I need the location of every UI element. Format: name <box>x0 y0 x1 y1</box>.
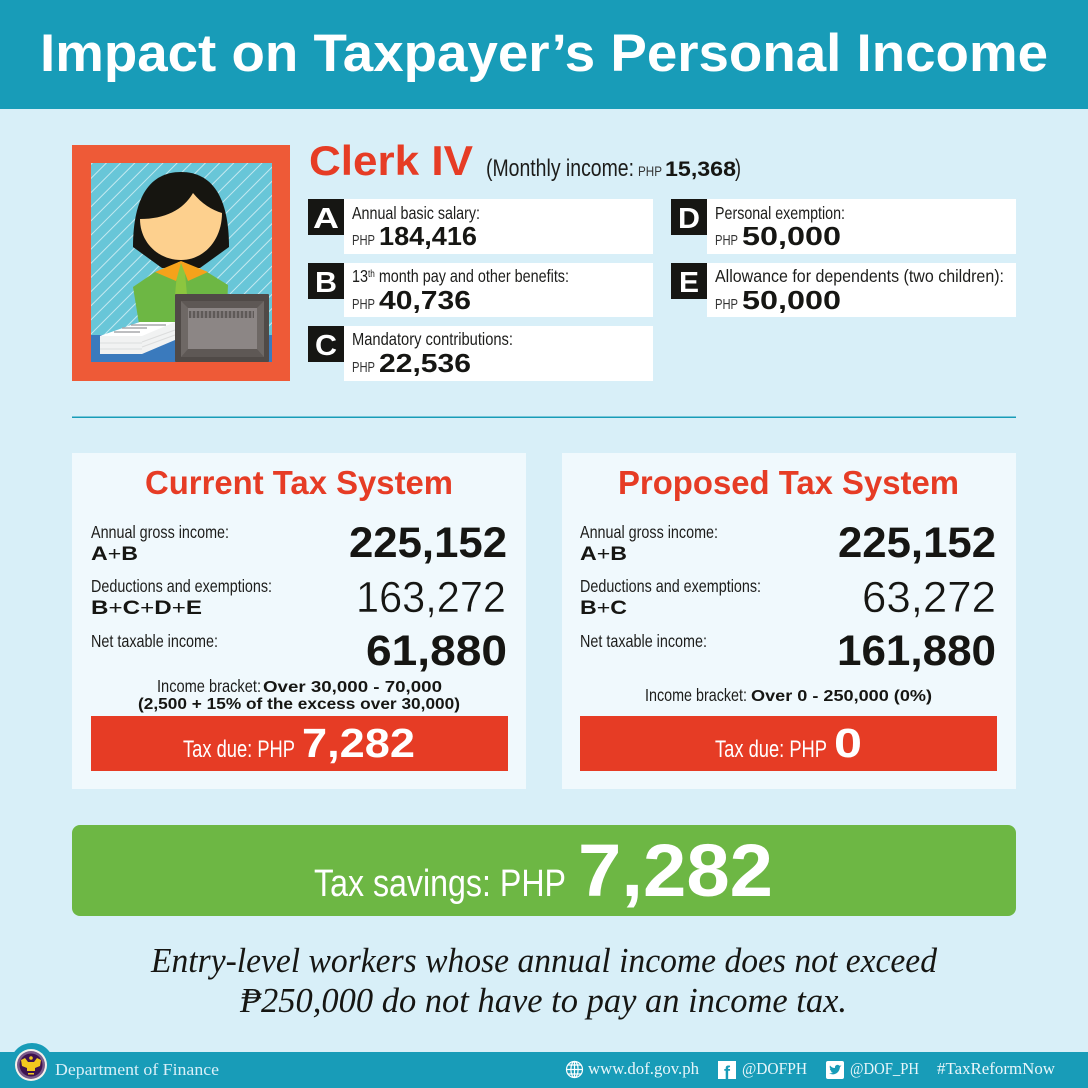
item B: 13th month pay: B <box>315 267 337 299</box>
tax due bar: Tax due: PHP <box>715 736 827 763</box>
title: Impact on Taxpayer’s Personal Income <box>40 24 1048 83</box>
row: net taxable income: 161,880 <box>837 627 996 675</box>
row: annual gross income <box>580 519 996 567</box>
item A: annual basic salary: Annual basic salary: <box>352 203 480 223</box>
row: annual gross income: Annual gross income: <box>580 522 718 542</box>
row: deductions and exemptions <box>580 573 996 622</box>
hashtag: #TaxReformNow <box>937 1059 1055 1078</box>
item C: mandatory contributions <box>308 326 653 381</box>
icon: globe <box>566 1062 582 1078</box>
tax due bar: 7,282 <box>302 720 415 766</box>
row: deductions and exemptions: B+C <box>580 598 627 619</box>
row: annual gross income <box>91 519 507 567</box>
item C: mandatory contributions: 22,536 <box>379 348 471 378</box>
income bracket: Over 30,000 - 70,000 <box>263 679 442 696</box>
icon: facebook <box>718 1061 736 1083</box>
website: www.dof.gov.ph <box>588 1059 700 1078</box>
row: net taxable income <box>91 627 507 675</box>
item E: allowance for dependents: Allowance for dependents (two children): <box>715 266 1004 286</box>
item D: personal exemption: Personal exemption: <box>715 203 845 223</box>
income bracket: Income bracket: <box>645 685 747 705</box>
monthly income: ) <box>735 155 741 182</box>
icon: Department of Finance seal <box>15 1049 47 1081</box>
item A: annual basic salary: A <box>313 203 339 235</box>
tax due bar: 0 <box>834 720 862 766</box>
item D: personal exemption <box>671 199 1016 254</box>
row: deductions and exemptions: 163,272 <box>356 573 506 622</box>
item E: allowance for dependents: E <box>679 267 699 299</box>
row: deductions and exemptions: Deductions and exemptions: <box>580 576 761 596</box>
tax due bar <box>91 716 508 771</box>
icon: facebook: f <box>724 1063 731 1083</box>
monthly income: PHP <box>638 163 662 179</box>
item E: allowance for dependents: PHP <box>715 296 738 313</box>
footer band <box>0 1043 1088 1088</box>
item B: 13th month pay: 40,736 <box>379 285 471 315</box>
row: annual gross income: A+B <box>580 544 627 565</box>
row: deductions and exemptions: Deductions and exemptions: <box>91 576 272 596</box>
row: annual gross income: 225,152 <box>838 519 996 567</box>
item B: 13th month pay: PHP <box>352 296 375 313</box>
tax due bar: Tax due: PHP <box>183 736 295 763</box>
item D: personal exemption: PHP <box>715 232 738 249</box>
icon: twitter <box>826 1061 844 1079</box>
row: deductions and exemptions <box>91 573 506 622</box>
header band <box>0 0 1088 109</box>
tax savings banner <box>72 825 1016 916</box>
heading: Clerk IV: Clerk IV <box>309 137 473 184</box>
heading: current tax system: Current Tax System <box>145 464 453 501</box>
item E: allowance for dependents <box>671 263 1016 317</box>
facebook handle: @DOFPH <box>742 1059 807 1078</box>
row: annual gross income: 225,152 <box>349 519 507 567</box>
closing statement <box>150 941 937 1020</box>
monthly income: 15,368 <box>665 158 736 181</box>
item B: 13th month pay: month pay and other benefits: <box>375 266 569 286</box>
row: annual gross income: Annual gross income: <box>91 522 229 542</box>
heading: proposed tax system: Proposed Tax System <box>618 464 959 501</box>
twitter handle: @DOF_PH <box>850 1059 919 1078</box>
item C: mandatory contributions: C <box>315 330 337 362</box>
income bracket <box>138 676 460 713</box>
income bracket: (2,500 + 15% of the excess over 30,000) <box>138 696 460 713</box>
income bracket <box>645 685 932 705</box>
item C: mandatory contributions: Mandatory contributions: <box>352 329 513 349</box>
row: deductions and exemptions: B+C+D+E <box>91 598 202 619</box>
row: annual gross income: A+B <box>91 544 138 565</box>
row: net taxable income <box>580 627 996 675</box>
row: net taxable income: Net taxable income: <box>580 631 707 651</box>
row: net taxable income: Net taxable income: <box>91 631 218 651</box>
portrait: clerk illustration <box>72 145 290 381</box>
item E: allowance for dependents: 50,000 <box>742 285 841 315</box>
item A: annual basic salary: 184,416 <box>379 221 477 251</box>
monthly income: (Monthly income: <box>486 155 634 182</box>
item B: 13th month pay: th <box>368 269 375 280</box>
item D: personal exemption: D <box>678 203 700 235</box>
panel: current tax system <box>72 453 526 789</box>
tax due bar <box>580 716 997 771</box>
item A: annual basic salary: PHP <box>352 232 375 249</box>
income bracket: Over 0 - 250,000 (0%) <box>751 688 932 705</box>
item B: 13th month pay <box>308 263 653 317</box>
row: net taxable income: 61,880 <box>366 627 507 675</box>
income bracket: Income bracket: <box>157 676 261 696</box>
organisation name: Department of Finance <box>55 1060 219 1079</box>
item B: 13th month pay: 13 <box>352 266 371 286</box>
tax savings banner: Tax savings: PHP <box>314 863 566 905</box>
closing statement: ₱250,000 do not have to pay an income tax. <box>239 981 847 1020</box>
item A: annual basic salary <box>308 199 653 254</box>
tax savings banner: 7,282 <box>578 829 773 912</box>
closing statement: Entry-level workers whose annual income does not exceed <box>150 941 937 980</box>
item D: personal exemption: 50,000 <box>742 221 841 251</box>
panel: proposed tax system <box>562 453 1016 789</box>
item C: mandatory contributions: PHP <box>352 359 375 376</box>
row: deductions and exemptions: 63,272 <box>862 573 996 622</box>
